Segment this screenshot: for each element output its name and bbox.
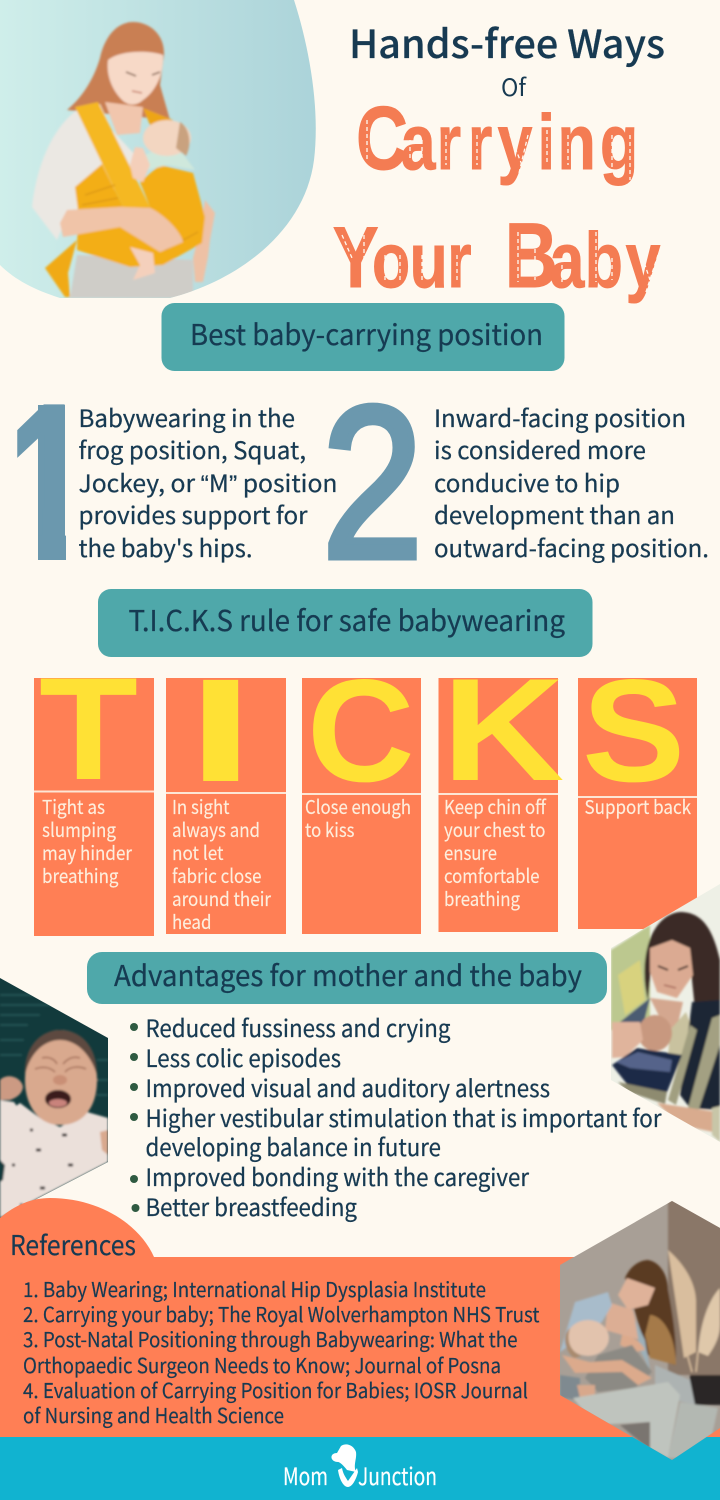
panel: references: [0, 1198, 720, 1437]
position 2 text: outward-facing position.: [434, 529, 709, 564]
card: I: fabric close: [172, 862, 262, 889]
references list: of Nursing and Health Science: [23, 1399, 284, 1429]
advantages list: [130, 1009, 662, 1223]
heading: best baby-carrying position: Best baby-carrying position: [190, 313, 543, 354]
references heading: References: [10, 1224, 136, 1263]
card: K: [438, 648, 564, 932]
heading: ticks rule: T.I.C.K.S rule for safe babywearing: [128, 599, 565, 640]
title line: carrying: arrying: [401, 98, 638, 186]
card: K: breathing: [444, 885, 520, 912]
position 2 text: development than an: [434, 496, 675, 531]
position 2 text: Inward-facing position: [434, 399, 686, 434]
advantages list: Reduced fussiness and crying: [146, 1009, 451, 1044]
card: I: head: [172, 908, 212, 935]
title line: your baby: B: [505, 204, 558, 307]
heading: best baby-carrying position: [162, 303, 564, 371]
logo: MomJunction: [283, 1444, 437, 1492]
footer band: [0, 1437, 720, 1500]
card: S: S: [582, 649, 685, 812]
position 1 text: provides support for: [78, 496, 308, 531]
references list: [23, 1273, 540, 1429]
title line: carrying: C: [356, 88, 408, 189]
title line: your baby: our: [372, 216, 471, 304]
photo: mother carrying baby in yellow sling: [0, 0, 320, 300]
card: C: Close enough: [305, 793, 411, 820]
card: K: comfortable: [444, 862, 540, 889]
card: I: not let: [172, 839, 224, 866]
position 1 text: Babywearing in the: [78, 399, 295, 434]
position 1 text: [78, 399, 338, 564]
logo icon: mother and child: [331, 1444, 358, 1487]
title line: hands-free ways: Hands-free Ways: [349, 14, 665, 70]
title: [333, 14, 665, 307]
references list: 3. Post-Natal Positioning through Babywearing: What the: [23, 1323, 518, 1353]
number 1: [17, 404, 66, 560]
card: K: K: [442, 648, 564, 811]
advantages list: Higher vestibular stimulation that is important for: [146, 1099, 662, 1134]
card: I: around their: [172, 885, 272, 912]
references list: 4. Evaluation of Carrying Position for Babies; IOSR Journal: [23, 1374, 528, 1404]
title line: your baby: aby: [550, 216, 660, 304]
logo: MomJunction: Junction: [358, 1457, 437, 1492]
card: K: your chest to: [444, 816, 546, 843]
card: C: [302, 650, 421, 934]
title line: your baby: Y: [333, 210, 379, 306]
card: T: Tight as: [42, 793, 105, 820]
references list: 2. Carrying your baby; The Royal Wolverhampton NHS Trust: [23, 1298, 540, 1328]
photo: mother with baby in dark wrap: [611, 884, 720, 1142]
bullet markers: [130, 1023, 140, 1212]
card: I: always and: [172, 816, 260, 843]
photo: crying baby: [0, 970, 110, 1220]
position 1 text: Jockey, or “M” position: [78, 464, 338, 499]
advantages list: Improved visual and auditory alertness: [146, 1069, 550, 1104]
number 1: 1: [8, 358, 91, 608]
card: K: Keep chin off: [444, 793, 547, 820]
position 1 text: frog position, Squat,: [78, 431, 306, 466]
card: C: to kiss: [305, 816, 355, 843]
heading: ticks rule: [98, 589, 592, 657]
card: I: [166, 648, 286, 935]
card: S: [578, 649, 697, 929]
card: T: may hinder: [42, 839, 133, 866]
position 2: [322, 362, 709, 604]
card: T: T: [39, 646, 138, 810]
position 2 text: [434, 399, 709, 564]
card: I: In sight: [172, 793, 230, 820]
position 2 text: conducive to hip: [434, 464, 620, 499]
advantages list: Better breastfeeding: [146, 1188, 357, 1223]
references list: 1. Baby Wearing; International Hip Dysplasia Institute: [23, 1273, 486, 1303]
advantages list: developing balance in future: [146, 1128, 441, 1163]
card: T: slumping: [42, 816, 116, 843]
number 2: 2: [322, 362, 423, 604]
card: C: C: [307, 650, 415, 813]
photo: mother breastfeeding on sofa: [555, 1195, 720, 1465]
position 2 text: is considered more: [434, 431, 646, 466]
card: S: Support back: [584, 793, 691, 820]
position 1: [17, 404, 336, 563]
logo: MomJunction: Mom: [283, 1457, 328, 1492]
card: K: ensure: [444, 839, 497, 866]
card: T: breathing: [42, 862, 119, 889]
advantages list: Less colic episodes: [146, 1039, 341, 1074]
references list: Orthopaedic Surgeon Needs to Know; Journal of Posna: [23, 1349, 501, 1379]
position 1 text: the baby's hips.: [78, 529, 252, 564]
title line: of: Of: [501, 68, 527, 103]
card: I: I: [187, 648, 254, 813]
heading: advantages: Advantages for mother and the baby: [114, 954, 582, 995]
card: T: [34, 646, 154, 936]
advantages list: Improved bonding with the caregiver: [146, 1158, 530, 1193]
